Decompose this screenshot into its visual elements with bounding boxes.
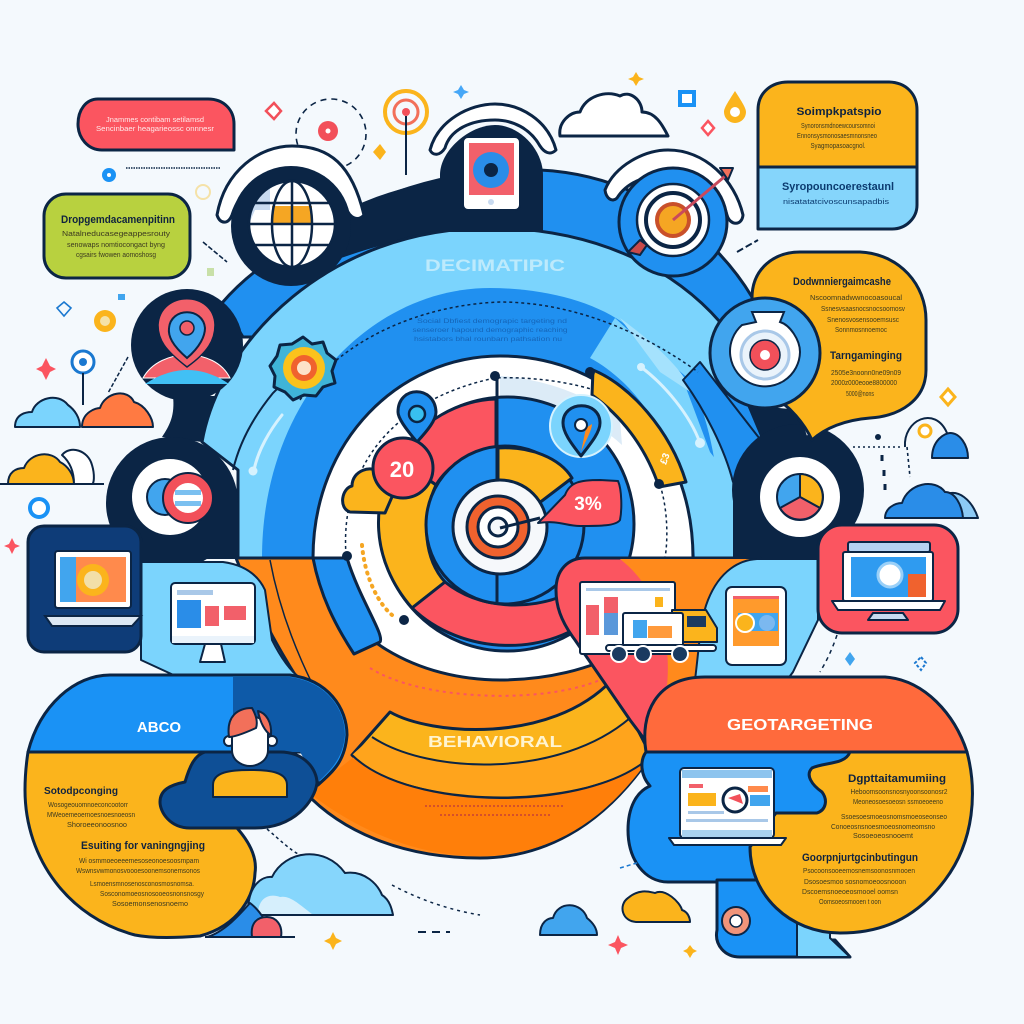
panel: top right card: Synoronsmdnoewcoursomnoi	[801, 123, 875, 130]
card: left laptop	[28, 526, 141, 652]
icon: desktop and truck	[580, 582, 717, 662]
inner blue ring	[248, 288, 763, 558]
callout: red note: Jnammes contibam setilamsd	[106, 117, 204, 124]
panel: abco: ABCO	[137, 719, 181, 736]
icon: tablet small	[726, 587, 786, 665]
chart marker dots	[342, 367, 664, 625]
panel: abco: Shoroeeonoosnoo	[67, 822, 127, 829]
panel: abco: Wi osmmoeoeeemesoseonoesoosmpam	[79, 858, 199, 865]
icon: target bullseye top	[385, 91, 427, 175]
badge: 20	[373, 438, 433, 498]
panel: right speech bubble	[710, 252, 926, 440]
icon: blue badge ring	[722, 907, 750, 935]
panel: geotargeting: Dgpttaitamumiing	[848, 773, 946, 785]
panel: geotargeting: Dscoemsnoeoeosmooel oomsn	[802, 889, 898, 896]
heading: behavioral: BEHAVIORAL	[428, 734, 562, 751]
cloud: right small dome	[905, 418, 968, 458]
icon: dashed circle with red dot	[296, 99, 366, 169]
callout: red note: Sencinbaer heagarieossc onnnesr	[96, 126, 215, 133]
panel: right speech bubble: Ssnesvsaasnocsnocsoomosv	[821, 306, 905, 313]
panel: abco: Wosogeouomnoeconcootorr	[48, 802, 129, 809]
panel: top right card: Syagmopasoacgnol.	[810, 143, 866, 150]
panel: top right card: Syropouncoerestaunl	[782, 181, 894, 193]
panel: geotargeting: Goorpnjurtgcinbutingun	[802, 852, 918, 864]
panel: geotargeting: Psocoonsooeemosnemsoonosnmooen	[803, 868, 915, 875]
panel: geotargeting: Oomsoeosmooen t oon	[819, 899, 881, 906]
icon: yellow cloud	[343, 469, 395, 513]
ring description text: hsistabors bhal rounbarn pathsation nu	[414, 336, 562, 343]
callout: lime note: cgsairs fwowen aomoshosg	[76, 252, 156, 259]
yellow arc segment	[592, 370, 686, 487]
icon: right pie circle	[732, 405, 864, 560]
cloud: left yellow	[0, 450, 104, 484]
panel: right speech bubble: Tarngaminging	[830, 350, 902, 362]
callout: lime note: Natalneducasegeappesrouty	[62, 231, 171, 238]
panel: right speech bubble: 2000z000eooe8800000	[831, 380, 897, 387]
cloud: right blue	[885, 484, 978, 518]
icon: laptop with target	[669, 768, 786, 845]
panel: abco: Sosconomoeosnosooeosnonsnosgy	[100, 891, 204, 898]
card: right monitor	[818, 525, 958, 633]
panel: geotargeting: Dsosoesmoo sosnomoeoosnooon	[804, 879, 906, 886]
panel: abco: Sotodpconging	[44, 785, 118, 797]
light blue ring	[202, 228, 733, 558]
icon: location pin badge	[550, 395, 612, 457]
panel: top right card	[758, 82, 917, 229]
heading: demographic: DECIMATIPIC	[425, 256, 565, 275]
badge: 20: 20	[390, 457, 414, 482]
icon: globe	[217, 146, 364, 286]
panel: right speech bubble: Dodwnniergaimcashe	[793, 276, 891, 288]
white ring	[313, 356, 693, 680]
outer blue ring	[222, 170, 763, 560]
panel: geotargeting: Meoneosoesoeosn ssmoeoeeno	[853, 799, 943, 806]
callout: 3%	[500, 480, 621, 528]
panel: right speech bubble: 5000@nons	[846, 391, 874, 398]
panel: abco: Lsmoensmnosenosconosmosnomsa.	[90, 881, 194, 888]
panel: right speech bubble: Nscoomnadwwnocoasoucal	[810, 295, 902, 302]
cloud: left orange	[82, 393, 153, 427]
panel: right speech bubble: Snenosvosensooemsusc	[827, 317, 899, 324]
panel: abco: Esuiting for vaningngjing	[81, 840, 205, 852]
panel: top right card: Soimpkpatspio	[796, 106, 882, 118]
icon: gear badge	[270, 337, 336, 400]
ring description text: Social Dbfiest demograpic targeting nd	[417, 318, 568, 325]
cloud: bottom small blue	[540, 905, 597, 935]
panel: right speech bubble: 2505e3noonn0ne09n09	[831, 370, 901, 377]
panel: geotargeting: Conoeosnsnoesmoeosnomeomsno	[831, 824, 935, 831]
callout: lime note: Dropgemdacamenpitinn	[61, 214, 175, 226]
panel: right speech bubble: Sonnmosnnoemoc	[835, 327, 887, 334]
callout: 3%: 3%	[574, 494, 602, 515]
panel: geotargeting: Ssoesoesmoeosnomsmoeoseonseo	[841, 814, 947, 821]
donut chart	[378, 372, 634, 651]
panel: geotargeting	[556, 558, 972, 957]
panel: geotargeting: GEOTARGETING	[727, 717, 873, 734]
icon: person	[213, 708, 287, 797]
behavioral orange band	[236, 558, 770, 858]
panel: geotargeting: Heboomsoonsnosnyoonsoonosr2	[850, 789, 948, 796]
panel: abco: MWeoemeoernoesnoesnoeosn	[47, 812, 135, 819]
callout: red note	[78, 99, 234, 150]
card: left monitor	[141, 562, 300, 678]
panel: top right card: Ennonsysmonosaesmnonsneo	[797, 133, 877, 140]
callout: lime note	[44, 194, 190, 278]
callout: lime note: senowaps nomtiocongact byng	[67, 242, 165, 249]
icon: tablet	[430, 104, 556, 232]
icon: map pin person	[131, 289, 243, 442]
cloud: bottom blue	[205, 854, 393, 937]
panel: abco	[25, 675, 347, 937]
cloud: left blue	[15, 398, 80, 427]
icon: target with arrow	[605, 150, 743, 276]
icon: blue pin	[398, 392, 436, 442]
panel: geotargeting: Sosoeoeosnooemt	[853, 833, 913, 840]
panel: top right card: nisatatatcivoscunsapadbis	[783, 199, 890, 206]
panel: abco: Sosoemonsenosnoemo	[112, 901, 188, 908]
icon: left toggle circle	[106, 437, 238, 569]
panel: abco: Wswnsvwmonosvoooesoonemsonemsonos	[76, 868, 200, 875]
cloud: top white	[560, 94, 668, 136]
yellow arc segment: £3	[658, 451, 673, 466]
cloud: bottom yellow	[622, 891, 690, 922]
ring description text	[412, 318, 568, 343]
ring description text: senseroer hapound demographic reaching	[412, 327, 568, 334]
